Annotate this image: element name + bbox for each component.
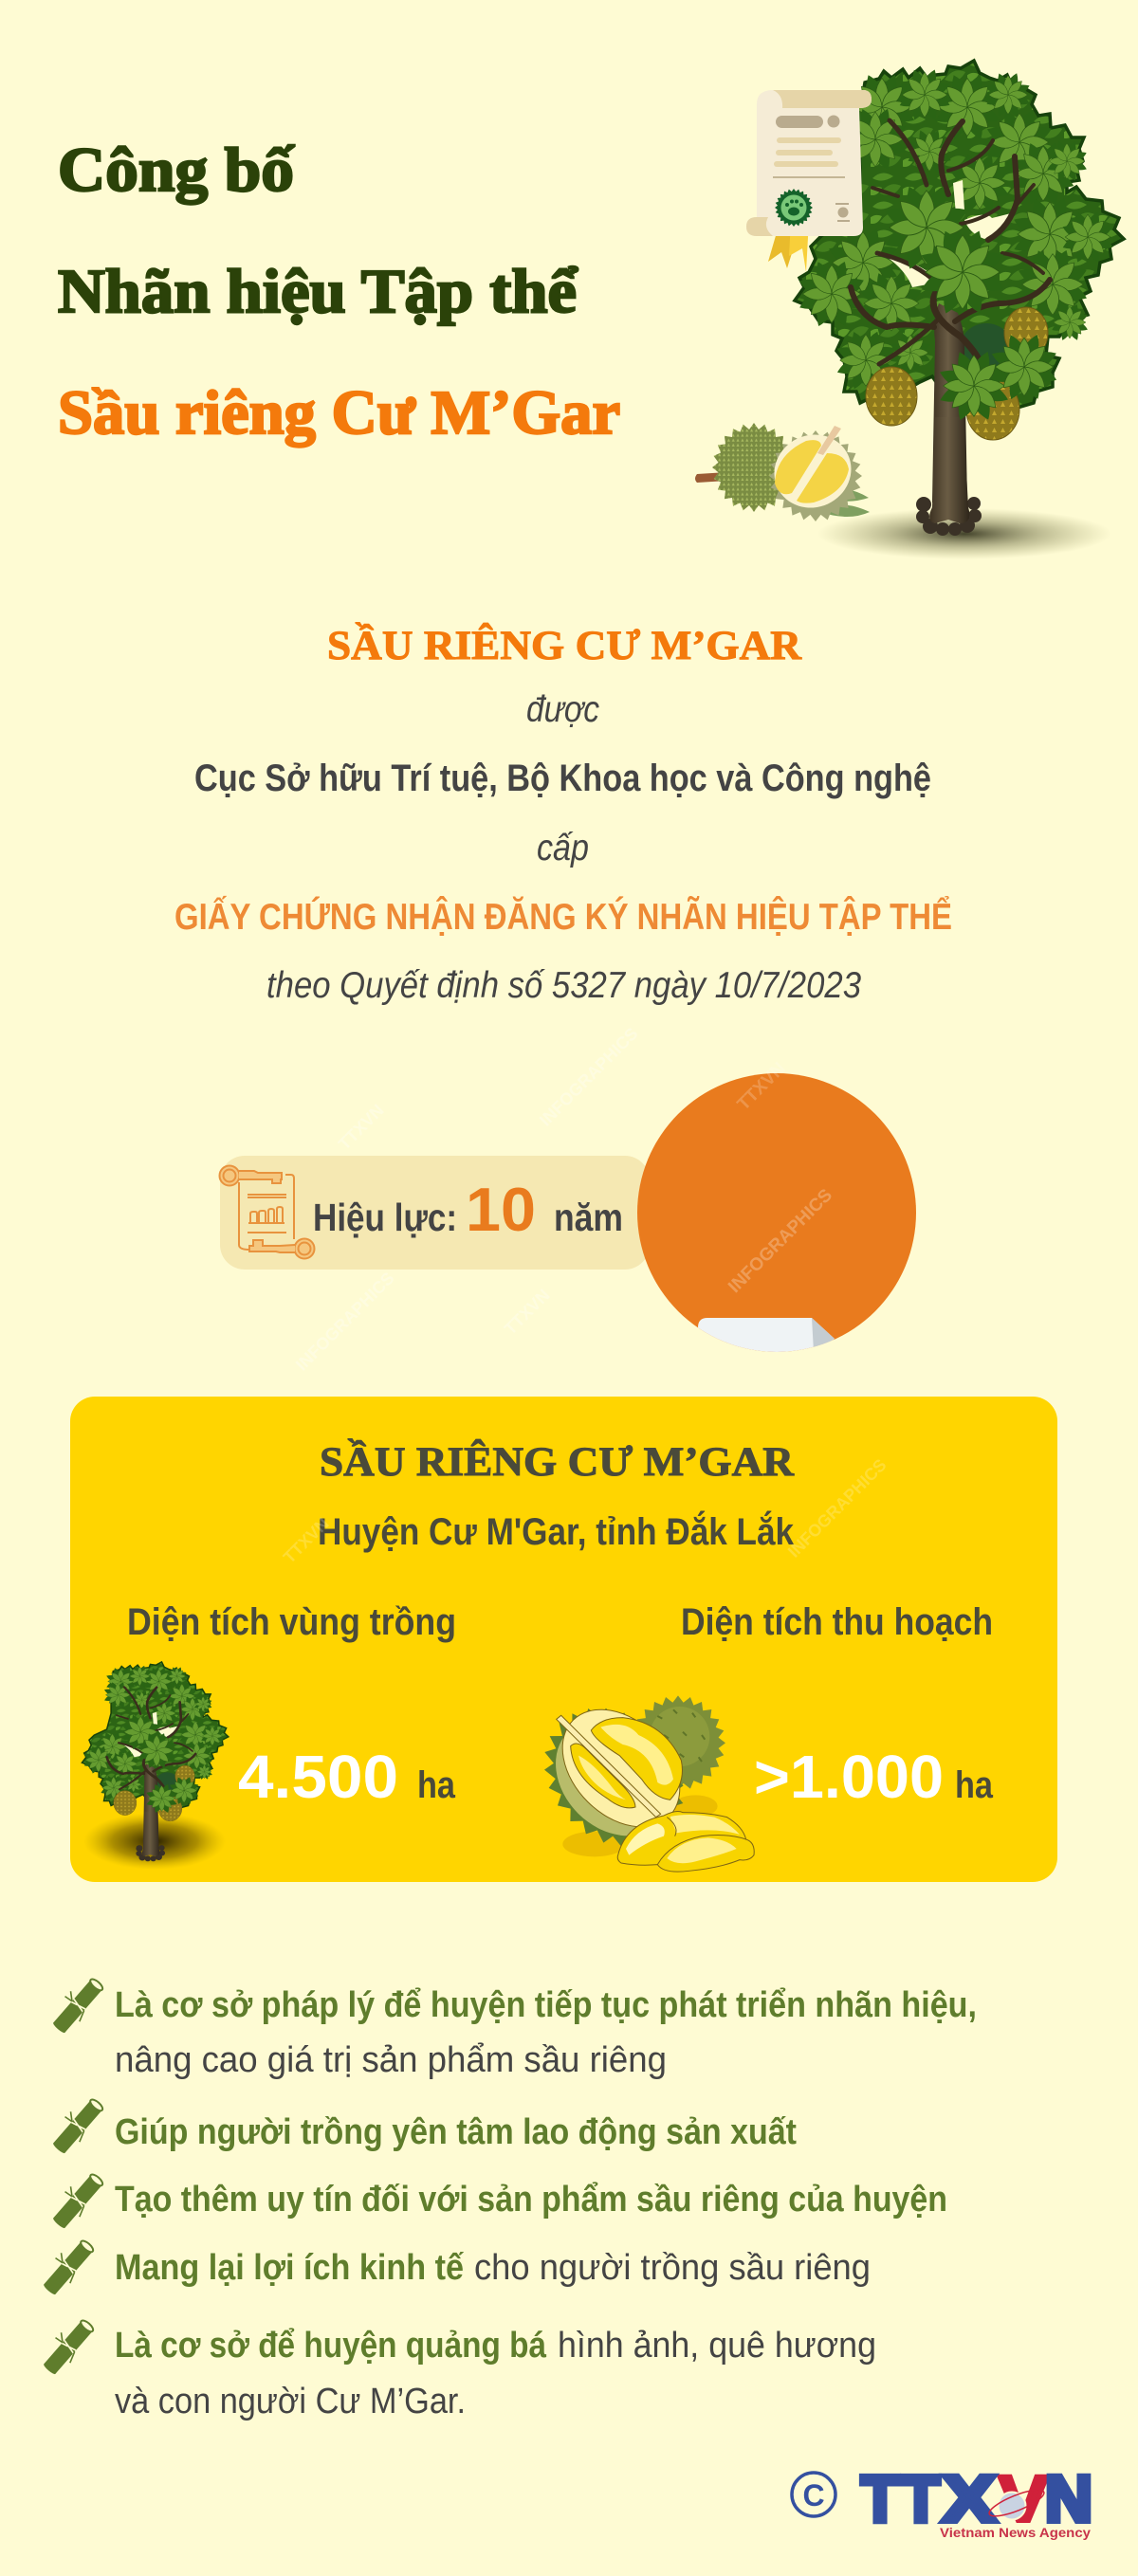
text: TTXVN (501, 1286, 554, 1339)
illustration: durian tree (795, 61, 1124, 559)
wordmark: T (861, 2462, 899, 2535)
text: INFOGRAPHICS (536, 1024, 642, 1130)
title line: Sầu riêng Cư M'Gar: Sầu riêng Cư M’Gar (58, 378, 620, 448)
validity number: 10 (466, 1175, 536, 1244)
benefit 4 bold text: Mang lại lợi ích kinh tế (115, 2248, 465, 2288)
validity unit: năm (554, 1196, 623, 1239)
validity label: Hiệu lực: (313, 1196, 457, 1239)
benefit 3 (46, 2167, 947, 2232)
benefit 4 regular text: cho người trồng sầu riêng (474, 2248, 871, 2288)
orange circle with paper (637, 1059, 916, 1356)
decision reference: theo Quyết định số 5327 ngày 10/7/2023 (266, 965, 861, 1006)
copyright mark: C (802, 2478, 825, 2512)
back durian (631, 1695, 725, 1790)
open durian half (762, 422, 863, 521)
wordmark: N (1045, 2462, 1092, 2535)
benefit 1 regular text: nâng cao giá trị sản phẩm sầu riêng (115, 2040, 667, 2080)
icon: scroll 4 (36, 2234, 98, 2298)
được: được (526, 689, 599, 730)
benefit 5 second line: và con người Cư M’Gar. (115, 2382, 466, 2421)
icon: durian with segments (516, 1679, 754, 1876)
leaves (820, 488, 870, 517)
benefit 5 (36, 2313, 876, 2421)
illustration: certificate scroll (746, 90, 872, 272)
benefit 2 text: Giúp người trồng yên tâm lao động sản xuất (115, 2112, 797, 2152)
issuing agency: Cục Sở hữu Trí tuệ, Bộ Khoa học và Công nghệ (194, 758, 931, 799)
intro text block (174, 623, 952, 1006)
harvest area number: >1.000 (754, 1743, 944, 1811)
globe (986, 2485, 1047, 2521)
panel: validity (220, 1059, 916, 1356)
icon: scroll 2 (46, 2092, 107, 2157)
harvest area unit: ha (955, 1764, 994, 1806)
benefit 5 regular text: hình ảnh, quê hương (558, 2326, 876, 2366)
text: INFOGRAPHICS (292, 1269, 398, 1375)
orange circle with paper: TTXVN (734, 1059, 790, 1115)
wordmark (861, 2462, 1092, 2535)
copyright mark (792, 2473, 835, 2516)
panel location: Huyện Cư M'Gar, tỉnh Đắk Lắk (318, 1509, 795, 1553)
benefit 4 (36, 2234, 871, 2298)
panel: area statistics: TTXVN (280, 1514, 333, 1567)
wordmark: X (943, 2462, 996, 2535)
wax seal (775, 189, 813, 227)
stem (695, 472, 728, 483)
tree shadow (817, 508, 1111, 559)
title (58, 136, 620, 448)
wordmark: V (999, 2462, 1048, 2535)
harvest area label: Diện tích thu hoạch (681, 1601, 993, 1643)
certificate name: GIẤY CHỨNG NHẬN ĐĂNG KÝ NHÃN HIỆU TẬP THỂ (174, 895, 952, 938)
ribbon (768, 216, 809, 272)
whole durian (712, 423, 796, 512)
paper (746, 90, 872, 236)
benefit 3 text: Tạo thêm uy tín đối với sản phẩm sầu riêng của huyện (115, 2180, 947, 2220)
icon: scroll 5 (36, 2313, 98, 2378)
orange circle with paper: INFOGRAPHICS (725, 1185, 836, 1297)
ground shadows (562, 1832, 626, 1856)
planting area number: 4.500 (238, 1743, 398, 1811)
open shell (516, 1679, 712, 1876)
tree (795, 61, 1124, 536)
benefit 1 bold text: Là cơ sở pháp lý để huyện tiếp tục phát triển nhãn hiệu, (115, 1985, 977, 2025)
illustration: durian cut open (695, 422, 870, 521)
cấp: cấp (537, 828, 589, 868)
wordmark: T (902, 2462, 940, 2535)
planting area unit: ha (417, 1764, 456, 1806)
planting area label: Diện tích vùng trồng (127, 1601, 456, 1643)
icon: document with scroll keys (220, 1166, 315, 1259)
title line: Nhãn hiệu Tập thể: Nhãn hiệu Tập thể (58, 257, 578, 326)
benefit 1 (46, 1972, 977, 2080)
icon: scroll 1 (46, 1972, 107, 2037)
benefit 5 bold text: Là cơ sở để huyện quảng bá (115, 2326, 547, 2366)
benefit 2 (46, 2092, 797, 2157)
panel heading: SẦU RIÊNG CƯ M’GAR (320, 1439, 795, 1485)
heading: SẦU RIÊNG CƯ M'GAR: SẦU RIÊNG CƯ M’GAR (327, 623, 802, 668)
validity pill (220, 1156, 650, 1270)
durian segments (617, 1812, 754, 1872)
agency name: Vietnam News Agency (940, 2525, 1091, 2540)
panel: area statistics (70, 1397, 1057, 1882)
icon: small tree (82, 1662, 229, 1870)
text: TTXVN (335, 1101, 388, 1154)
panel: area statistics: INFOGRAPHICS (784, 1455, 890, 1562)
icon: scroll 3 (46, 2167, 107, 2232)
logo: TTXVN (792, 2462, 1092, 2540)
panel background (70, 1397, 1057, 1882)
benefits list (36, 1972, 977, 2421)
title line: Công bố: Công bố (58, 136, 295, 205)
